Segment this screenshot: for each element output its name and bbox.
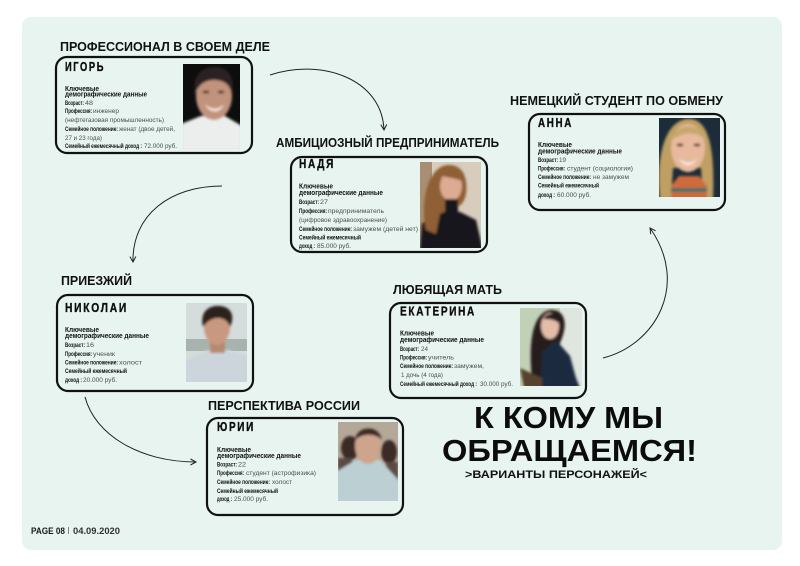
demographics: Nadya: предприниматель (328, 208, 385, 215)
demographics: Yuri: Семейный ежемесячный (217, 488, 278, 495)
name: Ekaterina: ЕКАТЕРИНА (400, 304, 476, 318)
demographics: Nadya (299, 184, 418, 250)
footer: page number and date: 04.09.2020 (73, 526, 120, 536)
demographics: Nikolai: ученик (93, 351, 115, 358)
demographics: Igor: 48 (85, 100, 94, 107)
demographics: Anna: Семейный ежемесячный (538, 182, 599, 190)
demographics: Nadya: Возраст: (299, 200, 319, 206)
card: Igor (56, 57, 252, 153)
demographics: Yuri: 25.000 руб. (234, 495, 268, 503)
heading: Ekaterina persona: ЛЮБЯЩАЯ МАТЬ (393, 283, 502, 297)
demographics: Yuri: Ключевые (217, 447, 251, 454)
arrow: Nadya to Nikolai (133, 186, 222, 262)
demographics: Ekaterina: Семейный ежемесячный доход : (400, 381, 477, 388)
demographics: Ekaterina: Ключевые (400, 330, 434, 338)
demographics: Igor: Возраст: (65, 101, 84, 107)
demographics: Nikolai: Ключевые (65, 327, 99, 334)
card: Ekaterina (390, 303, 586, 398)
demographics: Igor: Ключевые (65, 86, 99, 93)
demographics: Nadya: доход : (299, 244, 315, 250)
photo: Nadya (420, 162, 481, 248)
footer: page number and date: PAGE 08 (31, 526, 65, 536)
demographics: Yuri: Семейное положение: (217, 479, 270, 486)
demographics: Anna: студент (социология) (567, 166, 633, 172)
demographics: Anna: Профессия: (538, 166, 565, 172)
arrow: Ekaterina to Anna (603, 228, 667, 358)
heading: Nikolai persona: ПРИЕЗЖИЙ (61, 273, 132, 288)
demographics: Yuri: 22 (238, 462, 247, 468)
demographics: Yuri: демографические данные (217, 453, 301, 460)
card: Anna (529, 114, 725, 210)
demographics: Igor: (нефтегазовая промышленность) (65, 117, 164, 124)
demographics: Igor: демографические данные (65, 92, 147, 98)
demographics: Ekaterina: демографические данные (400, 337, 484, 344)
demographics: Nadya: демографические данные (299, 190, 383, 197)
demographics: Ekaterina: 24 (421, 346, 428, 353)
card: Nikolai (57, 295, 253, 391)
name: Anna: АННА (538, 115, 573, 130)
demographics: Anna: Семейное положение: (538, 174, 591, 181)
demographics: Ekaterina: Профессия: (400, 354, 427, 362)
demographics: Igor: Профессия: (65, 108, 92, 115)
demographics: Ekaterina: 30.000 руб. (480, 380, 513, 388)
main title: ОБРАЩАЕМСЯ! (442, 433, 697, 468)
demographics: Anna: Ключевые (538, 142, 572, 149)
demographics: Nadya: (цифровое здравоохранение) (299, 217, 387, 224)
demographics: Nikolai (65, 327, 149, 384)
card: Nadya (291, 156, 487, 252)
demographics: Anna (538, 142, 633, 199)
demographics: Anna: демографические данные (538, 148, 622, 156)
name: Nikolai: НИКОЛАИ (65, 300, 128, 315)
photo: Yuri (338, 422, 398, 501)
demographics: Igor (65, 86, 177, 150)
demographics: Yuri: холост (272, 479, 292, 486)
demographics: Nikolai: 20.000 руб. (83, 376, 117, 384)
photo: Nikolai (186, 303, 247, 382)
demographics: Nikolai: доход : (65, 378, 82, 384)
card: Yuri (207, 418, 403, 515)
demographics: Anna: 60.000 руб. (557, 191, 591, 199)
heading: Anna persona: НЕМЕЦКИЙ СТУДЕНТ ПО ОБМЕНУ (510, 93, 723, 108)
demographics: Ekaterina: учитель (428, 354, 455, 362)
photo: Igor (183, 64, 240, 149)
demographics: Nadya: 85.000 руб. (317, 242, 351, 250)
photo: Anna (659, 118, 720, 197)
demographics: Yuri: Профессия: (217, 470, 244, 477)
demographics: Nadya: Ключевые (299, 184, 333, 190)
demographics: Ekaterina: 1 дочь (4 года) (401, 372, 443, 379)
arrow: Nikolai to Yuri (85, 397, 196, 462)
demographics: Igor: 27 и 23 года) (65, 135, 102, 142)
demographics: Nikolai: холост (119, 360, 142, 366)
demographics: Ekaterina: замужем, (454, 363, 484, 370)
demographics: Nadya: Профессия: (299, 208, 327, 215)
heading: Nadya persona: АМБИЦИОЗНЫЙ ПРЕДПРИНИМАТЕЛЬ (276, 135, 499, 150)
demographics: Nikolai: демографические данные (65, 333, 149, 340)
demographics: Ekaterina: Возраст: (400, 347, 419, 353)
demographics: Igor: Семейный ежемесячный доход : (65, 143, 142, 150)
demographics: Nikolai: Возраст: (65, 343, 85, 349)
demographics: Ekaterina: Семейное положение: (400, 363, 453, 370)
demographics: Nadya: Семейный ежемесячный (299, 234, 361, 242)
demographics: Nikolai: Семейный ежемесячный (65, 368, 127, 375)
demographics: Yuri: Возраст: (217, 462, 237, 468)
heading: Yuri persona: ПЕРСПЕКТИВА РОССИИ (208, 399, 360, 413)
demographics: Igor: 72.000 руб. (144, 142, 177, 150)
demographics: Yuri (217, 447, 316, 503)
demographics: Ekaterina (400, 330, 513, 388)
demographics: Anna: не замужем (593, 174, 629, 181)
demographics: Anna: Возраст: (538, 158, 558, 164)
demographics: Yuri: студент (астрофизика) (246, 470, 316, 477)
demographics: Nadya: замужем (детей нет) (353, 225, 418, 233)
demographics: Nadya: Семейное положение: (299, 226, 352, 233)
main title (442, 400, 697, 468)
footer: page number and date (31, 526, 120, 536)
demographics: Igor: женат (двое детей, (119, 125, 175, 133)
demographics: Yuri: доход : (217, 497, 232, 503)
demographics: Nikolai: 16 (86, 342, 95, 349)
demographics: Nikolai: Профессия: (65, 351, 92, 358)
demographics: Anna: 19 (559, 157, 566, 164)
main title: К КОМУ МЫ (474, 400, 663, 435)
heading: Igor persona: ПРОФЕССИОНАЛ В СВОЕМ ДЕЛЕ (60, 40, 270, 54)
demographics: Igor: инженер (93, 108, 119, 115)
demographics: Nikolai: Семейное положение: (65, 360, 118, 366)
photo: Ekaterina (520, 308, 582, 386)
name: Yuri: ЮРИИ (217, 419, 255, 434)
name: Nadya: НАДЯ (299, 156, 335, 171)
demographics: Anna: доход : (538, 193, 555, 199)
name: Igor: ИГОРЬ (65, 59, 105, 74)
subtitle: >ВАРИАНТЫ ПЕРСОНАЖЕЙ< (465, 468, 647, 481)
demographics: Nadya: 27 (320, 199, 329, 206)
arrow: Igor to Nadya (270, 69, 384, 130)
demographics: Igor: Семейное положение: (65, 126, 118, 133)
